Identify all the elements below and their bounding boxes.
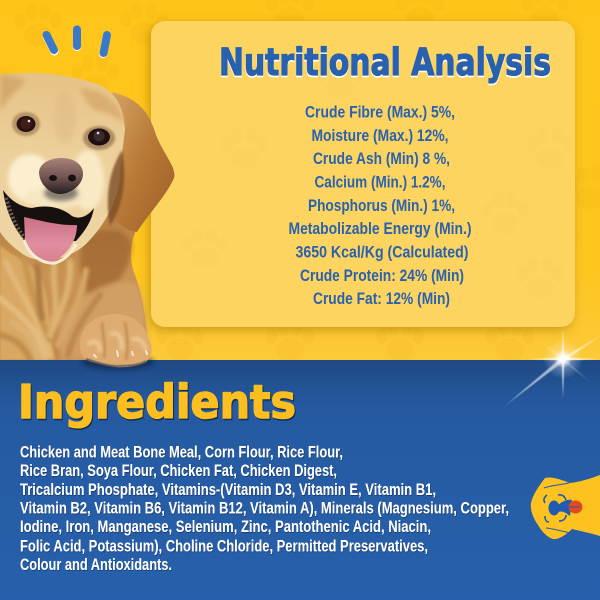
panel: nutritional analysis card [151,21,575,327]
text block: nutrient list: 3650 Kcal/Kg (Calculated) [296,242,468,262]
icon: yellow cartoon dog head [531,475,600,539]
dog left eye [12,112,40,136]
icon: sparkle star on band edge [506,328,600,405]
yellow background [0,0,600,361]
dog head [0,73,125,260]
heading: Ingredients: Ingredients [19,376,297,430]
text block: nutrient list: Crude Protein: 24% (Min) [300,266,464,285]
text block: ingredient list: Iodine, Iron, Manganese, Selenium, Zinc, Pantothenic Acid, Niacin, [20,518,431,536]
text block: nutrient list: Moisture (Max.) 12%, [312,126,448,145]
text block: nutrient list: Metabolizable Energy (Min.) [288,219,472,238]
heading: Ingredients: Ingredients [18,375,296,429]
text block: nutrient list: Crude Fibre (Max.) 5%, [305,102,455,122]
dog right ear [110,92,174,232]
text block: ingredient list: Folic Acid, Potassium), Choline Chloride, Permitted Preservatives, [20,538,428,556]
dog right eye [83,126,115,150]
illustration: golden retriever [0,73,174,360]
text block: nutrient list: Calcium (Min.) 1.2%, [314,172,446,192]
text block: nutrient list: Crude Fat: 12% (Min) [313,289,450,308]
text block: ingredient list [20,444,509,574]
text block: ingredient list: Tricalcium Phosphate, Vitamins-(Vitamin D3, Vitamin E, Vitamin B1, [20,481,436,499]
dog body and chest fur [0,190,148,360]
text block: ingredient list: Colour and Antioxidants. [20,556,172,574]
background paw prints [14,0,600,361]
icon: three blue excitement dashes [46,30,107,54]
text block: nutrient list [288,102,472,308]
panel: ingredients blue band [0,354,600,600]
text block: nutrient list: Phosphorus (Min.) 1%, [308,196,455,215]
face shading [0,75,125,226]
text block: nutrient list: Crude Ash (Min) 8 %, [313,149,450,168]
text block: ingredient list: Chicken and Meat Bone Meal, Corn Flour, Rice Flour, [20,444,343,462]
dog nose [39,158,83,201]
dog front paw [80,314,152,367]
text block: ingredient list: Rice Bran, Soya Flour, Chicken Fat, Chicken Digest, [20,462,337,480]
dog mouth [3,190,94,263]
